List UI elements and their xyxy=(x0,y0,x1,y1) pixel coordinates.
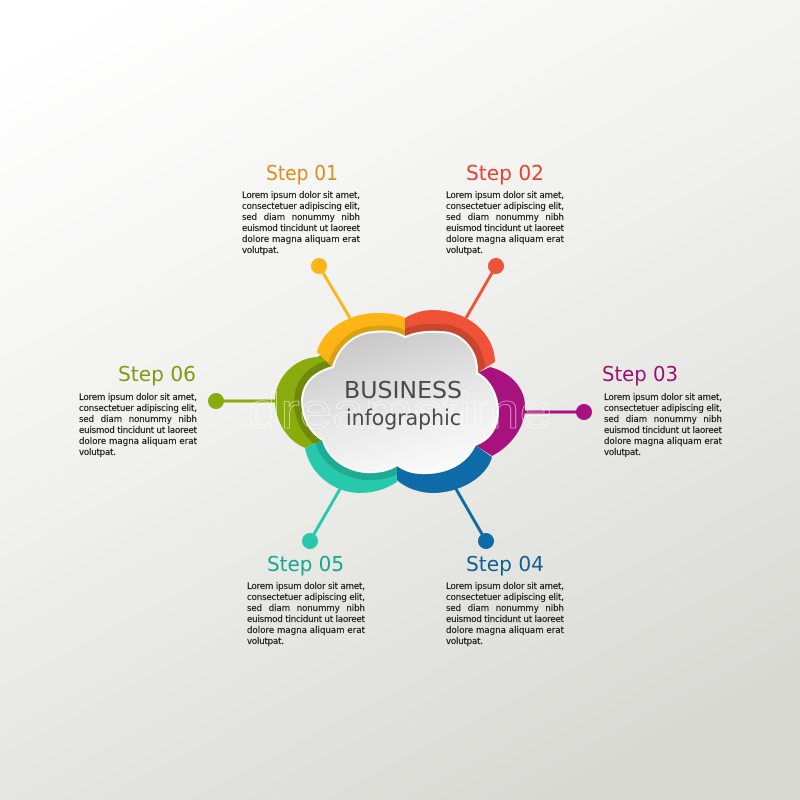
cloud diagram xyxy=(248,310,552,493)
step 04: Step 04 xyxy=(466,552,544,576)
cloud panel xyxy=(302,332,498,473)
step 03: dolore magna aliquam erat xyxy=(604,437,723,447)
step 05: Lorem ipsum dolor sit amet, xyxy=(247,582,365,592)
step 01: dolore magna aliquam erat xyxy=(242,235,361,245)
step 01: volutpat. xyxy=(242,246,279,256)
step 02: volutpat. xyxy=(446,246,483,256)
step 04: consectetuer adipiscing elit, xyxy=(446,593,564,603)
step 05: consectetuer adipiscing elit, xyxy=(247,593,365,603)
step 06: Lorem ipsum dolor sit amet, xyxy=(79,393,197,403)
segment: yellow xyxy=(317,313,405,366)
step 06 xyxy=(79,362,198,458)
step 03: volutpat. xyxy=(604,448,641,458)
segment: teal xyxy=(305,440,397,493)
step 05: dolore magna aliquam erat xyxy=(247,626,366,636)
step 01 xyxy=(242,161,361,256)
step 01: sed diam nonummy nibh xyxy=(242,213,360,223)
subtitle: infographic: infographic xyxy=(346,406,461,430)
segment: green xyxy=(275,355,332,448)
step 04: Lorem ipsum dolor sit amet, xyxy=(446,582,564,592)
step 02: Lorem ipsum dolor sit amet, xyxy=(446,191,564,201)
step 03: consectetuer adipiscing elit, xyxy=(604,404,722,414)
step 06: sed diam nonummy nibh xyxy=(79,415,197,425)
step 02: Step 02 xyxy=(466,161,544,185)
step 02: dolore magna aliquam erat xyxy=(446,235,565,245)
step 06: Step 06 xyxy=(118,362,196,386)
step 01: consectetuer adipiscing elit, xyxy=(242,202,360,212)
segment: red xyxy=(405,310,495,372)
step 03: sed diam nonummy nibh xyxy=(604,415,722,425)
step 03: Step 03 xyxy=(602,362,678,386)
step 02: sed diam nonummy nibh xyxy=(446,213,564,223)
step 03: Lorem ipsum dolor sit amet, xyxy=(604,393,722,403)
step 05: Step 05 xyxy=(267,552,344,576)
step 02 xyxy=(446,161,565,256)
segment: magenta xyxy=(400,367,525,456)
title: BUSINESS: BUSINESS xyxy=(344,378,462,404)
step 05 xyxy=(247,552,366,647)
step 04: volutpat. xyxy=(446,637,483,647)
step 03 xyxy=(602,362,723,458)
step 04: sed diam nonummy nibh xyxy=(446,604,564,614)
step 04 xyxy=(446,552,565,647)
step 06: consectetuer adipiscing elit, xyxy=(79,404,197,414)
step 04: euismod tincidunt ut laoreet xyxy=(446,615,565,625)
step 05: sed diam nonummy nibh xyxy=(247,604,365,614)
step 01: euismod tincidunt ut laoreet xyxy=(242,224,361,234)
step 02: euismod tincidunt ut laoreet xyxy=(446,224,565,234)
step 06: dolore magna aliquam erat xyxy=(79,437,198,447)
segment: blue xyxy=(397,400,492,493)
watermark: dreamstime xyxy=(248,383,552,439)
connector lines and dots xyxy=(208,258,592,549)
step 02: consectetuer adipiscing elit, xyxy=(446,202,564,212)
step 06: volutpat. xyxy=(79,448,116,458)
step 01: Step 01 xyxy=(266,161,338,185)
step 05: volutpat. xyxy=(247,637,284,647)
step 05: euismod tincidunt ut laoreet xyxy=(247,615,366,625)
step 01: Lorem ipsum dolor sit amet, xyxy=(242,191,360,201)
step 03: euismod tincidunt ut laoreet xyxy=(604,426,723,436)
step 06: euismod tincidunt ut laoreet xyxy=(79,426,198,436)
step 04: dolore magna aliquam erat xyxy=(446,626,565,636)
